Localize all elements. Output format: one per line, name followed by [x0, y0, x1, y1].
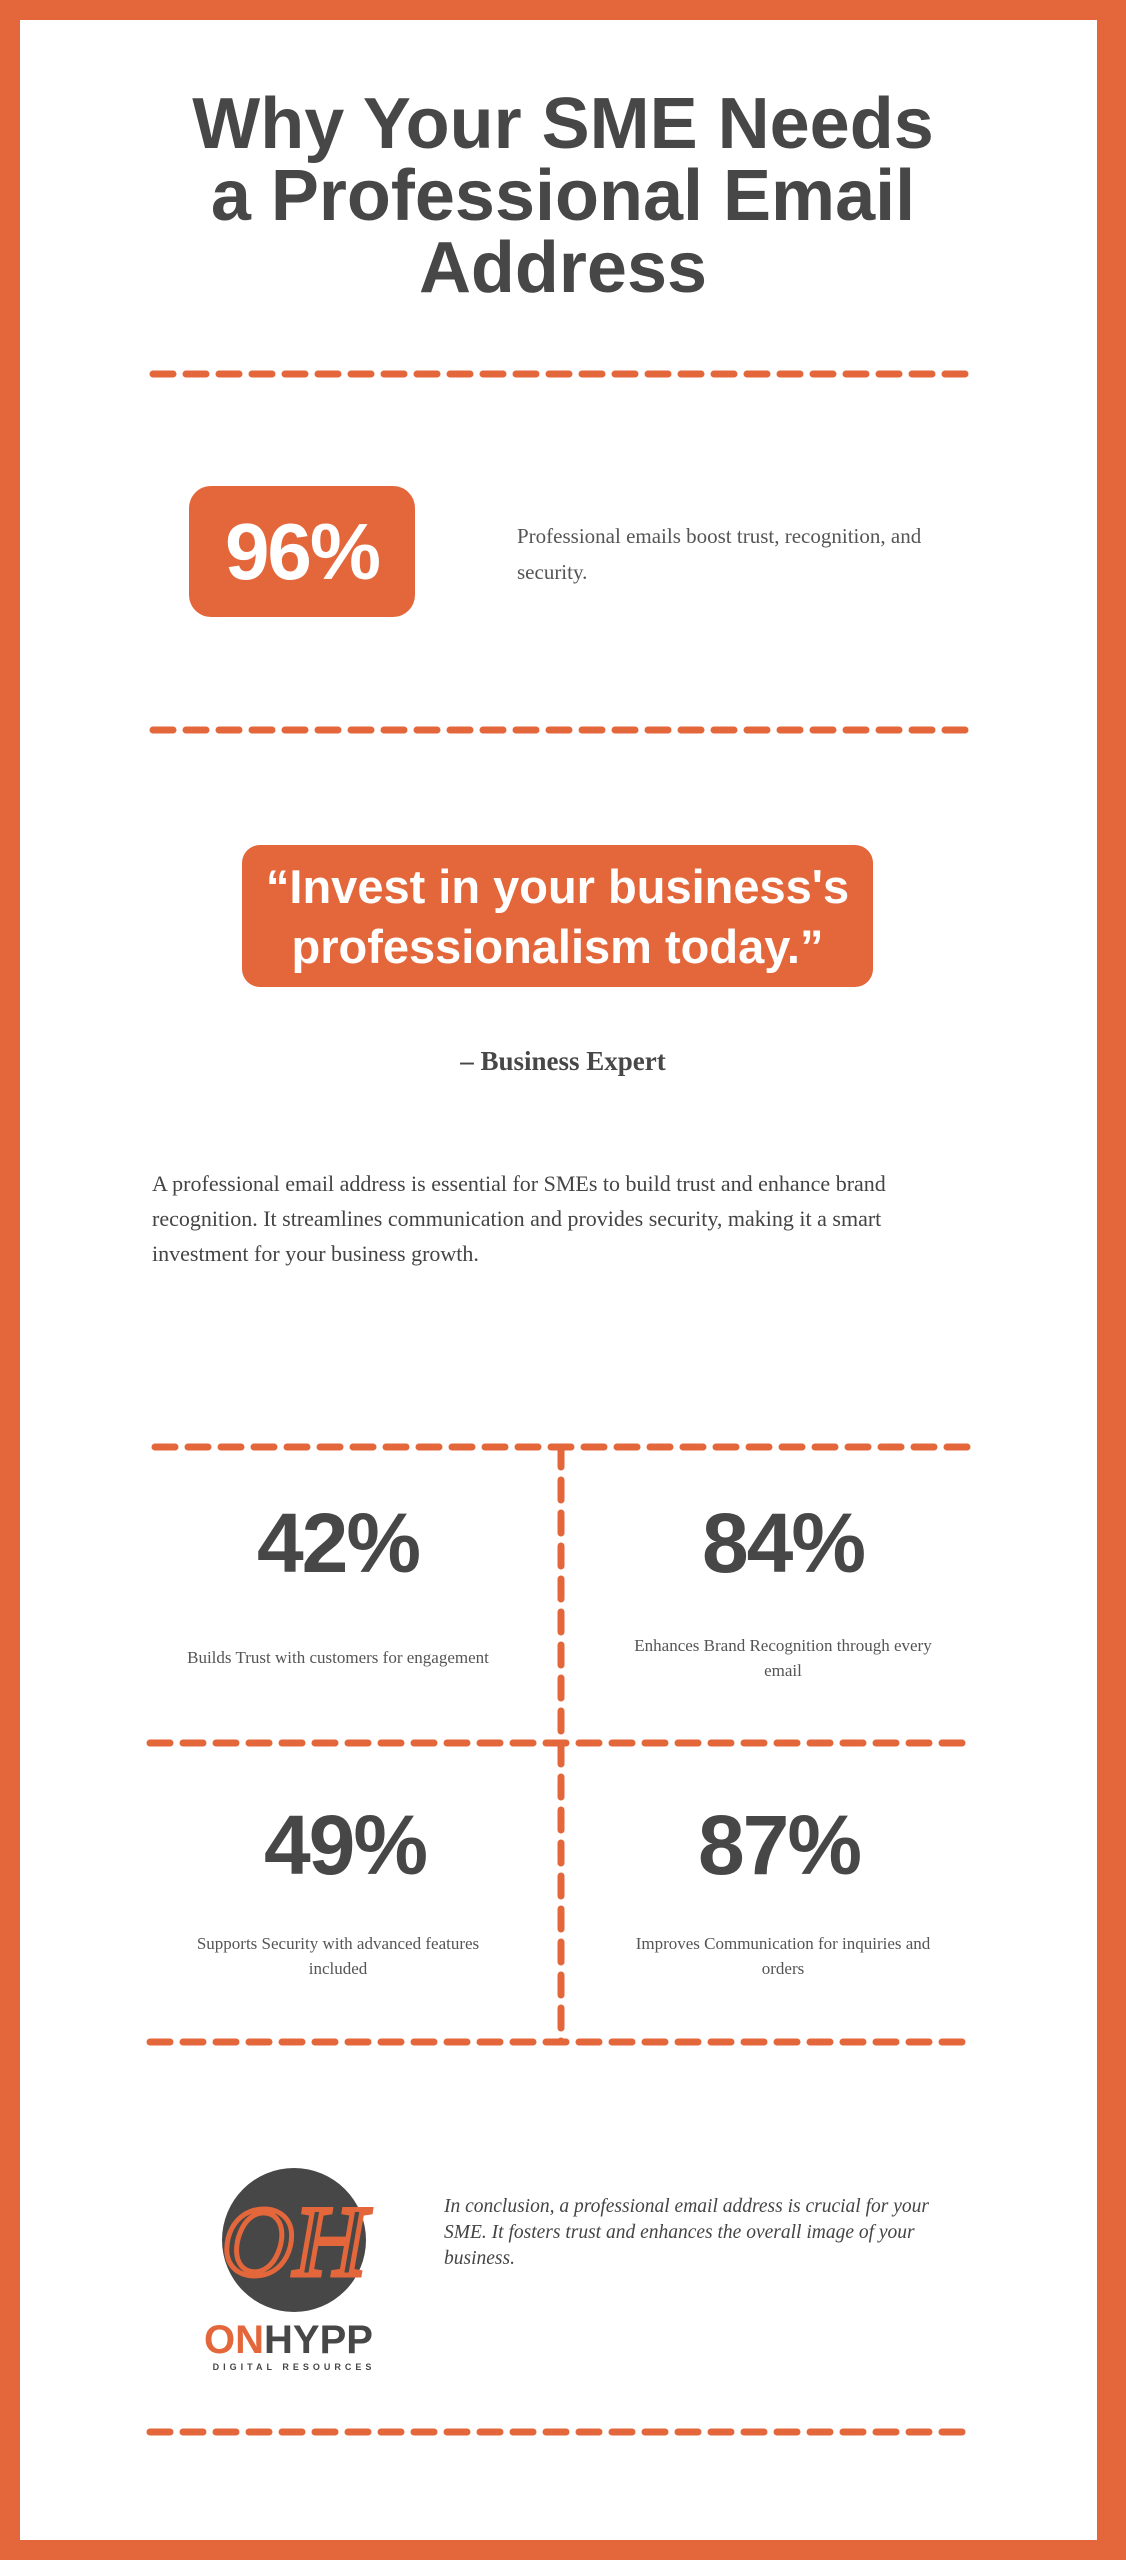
label: trust: Builds Trust with customers for engagement: [187, 1648, 489, 1667]
label: brand: Enhances Brand Recognition through every email: [634, 1636, 932, 1680]
stat box 96%: 96%: [225, 507, 379, 596]
logo: ONHYPP: OH: [222, 2186, 371, 2297]
title: Why Your SME Needs: [192, 84, 934, 164]
title: Address: [419, 228, 707, 308]
label: security: Supports Security with advanced features included: [197, 1934, 479, 1978]
logo: ONHYPP: ON: [204, 2318, 264, 2362]
stat description: Professional emails boost trust, recognition, and security.: [517, 524, 921, 584]
stat: 84%: 84%: [702, 1496, 864, 1590]
quote attribution: – Business Expert: [460, 1046, 666, 1076]
intro paragraph: A professional email address is essential for SMEs to build trust and enhance brand recognition. It streamlines communication and provides security, making it a smart investment for your business growth.: [152, 1171, 886, 1266]
stat: 87%: 87%: [698, 1798, 860, 1892]
logo: ONHYPP: [204, 2168, 375, 2372]
stat: 49%: 49%: [264, 1798, 426, 1892]
conclusion text: In conclusion, a professional email address is crucial for your SME. It fosters trust and enhances the overall image of your business.: [444, 2196, 929, 2269]
logo: ONHYPP: DIGITAL RESOURCES: [213, 2362, 375, 2372]
stat: 42%: 42%: [257, 1496, 419, 1590]
title: [192, 84, 934, 308]
quote box: “Invest in your business's professionalism today.”: [266, 860, 849, 973]
label: communication: Improves Communication for inquiries and orders: [636, 1934, 930, 1978]
title: a Professional Email: [211, 156, 915, 236]
stat grid: [187, 1496, 932, 1978]
logo: ONHYPP: HYPP: [264, 2318, 373, 2362]
stat box 96%: [189, 486, 415, 617]
